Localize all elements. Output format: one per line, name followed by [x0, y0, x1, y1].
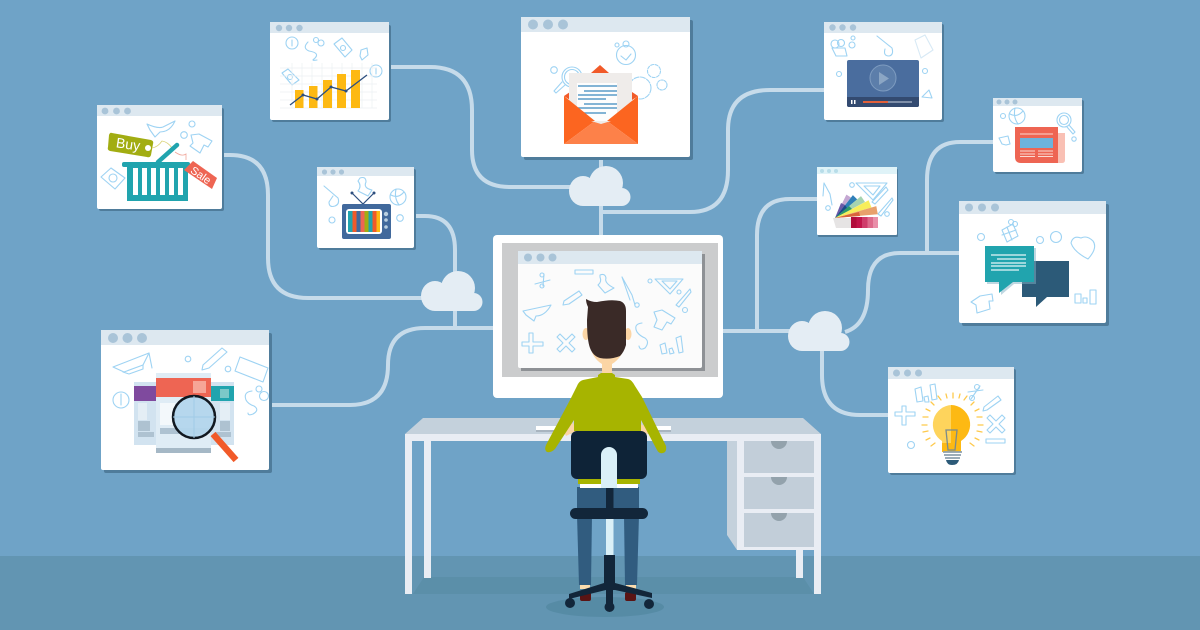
panel: tv window	[317, 167, 416, 250]
panel: email window	[521, 17, 693, 160]
grid	[280, 63, 377, 108]
icon: line icons camera, music, film	[831, 35, 933, 98]
icon: video player	[847, 60, 919, 107]
person: green sweater	[545, 373, 666, 453]
line chart	[290, 75, 367, 105]
drawers	[727, 441, 821, 550]
icon: shopping basket	[122, 145, 190, 201]
keyboard	[536, 426, 671, 432]
panel: monitor window	[518, 251, 702, 368]
icon: buy tag: Buy	[115, 134, 141, 154]
person: hair	[586, 299, 626, 359]
panel: light bulb window	[888, 367, 1016, 475]
panel: chart window	[270, 22, 391, 122]
icon: line icons magnifier, clock, gears	[551, 41, 667, 99]
icon: line icons shoe, shirt, camera	[101, 121, 212, 189]
chair shadow	[546, 597, 664, 617]
icon: money line icons	[282, 37, 382, 85]
icon: line icons maths	[895, 384, 1005, 448]
icon: line icons globe, magnifier	[999, 108, 1076, 145]
office chair	[565, 431, 654, 612]
cloud: top	[569, 166, 630, 206]
icon: line icons compass, set square, pencil	[823, 183, 893, 216]
panel: news window	[993, 98, 1084, 174]
icon: line icons cap, pencil, card, dollar	[113, 348, 268, 415]
icon: colour fan	[833, 195, 878, 228]
cloud: left	[421, 271, 482, 311]
person: legs	[577, 487, 639, 601]
cloud: right	[788, 311, 850, 351]
network connector lines	[222, 67, 993, 415]
icon: light bulb	[922, 393, 983, 465]
icon: web pages under magnifier	[134, 373, 234, 453]
panel: chat window	[959, 201, 1109, 326]
bar chart	[295, 70, 360, 108]
person	[545, 299, 666, 601]
icon: teal speech bubble	[985, 246, 1036, 295]
panel: video window	[824, 22, 944, 122]
panel: shopping window	[97, 105, 224, 211]
icon: television	[342, 192, 391, 239]
icon: magnifying glass	[173, 396, 236, 460]
icon: sale tag: Sale	[188, 165, 213, 187]
panel: search window	[101, 330, 272, 473]
icon: line icons gift, heart, shirt, bars	[971, 220, 1096, 313]
icon: dark speech bubble	[1022, 261, 1069, 307]
panel: colour palette window	[817, 167, 898, 237]
icon: envelope	[564, 65, 638, 144]
person: hands	[562, 423, 650, 436]
desk	[405, 418, 821, 594]
icon: line icons music, stamp, globe	[324, 178, 406, 223]
icon: newspaper	[1015, 127, 1065, 163]
icon: line icons math and shapes	[522, 270, 691, 354]
monitor	[493, 235, 723, 398]
person: neck and ears	[582, 328, 632, 377]
